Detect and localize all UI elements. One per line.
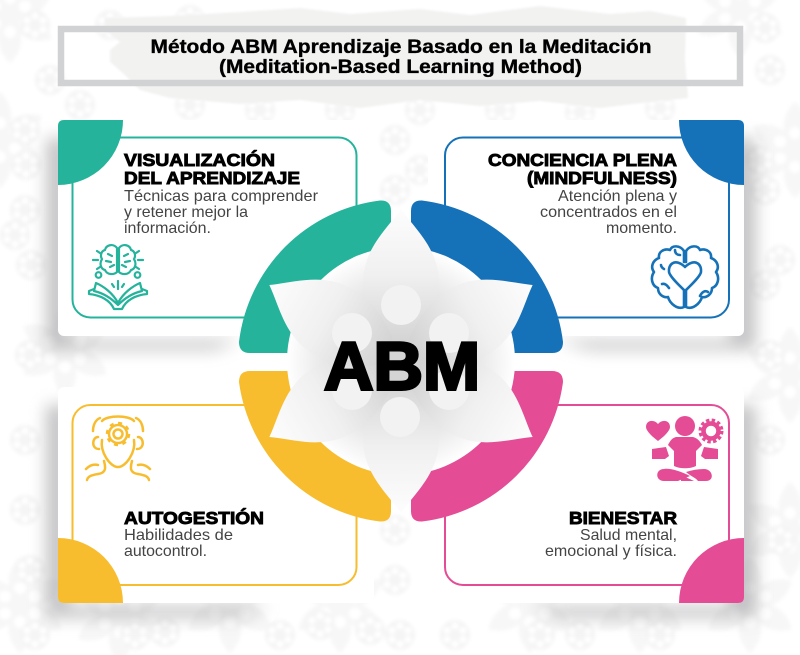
description: emocional y física. [545,543,677,560]
description: momento. [606,220,677,237]
panel: conciencia plena [428,120,744,336]
heading: BIENESTAR [569,508,677,528]
description: autocontrol. [124,543,207,560]
central ring: blue segment [411,200,563,353]
heading: DEL APRENDIZAJE [124,168,300,188]
heading: VISUALIZACIÓN [124,149,275,170]
icon: brain with heart [652,246,718,308]
description: Atención plena y [558,188,677,205]
central flower [250,209,552,513]
description: y retener mejor la [124,204,248,221]
description [540,188,677,237]
central ring: yellow segment [239,371,391,522]
description: Técnicas para comprender [124,188,319,205]
description: concentrados en el [540,204,677,221]
heading: (MINDFULNESS) [527,168,677,188]
center label ABM: ABM [324,328,480,404]
title subtitle: (Meditation-Based Learning Method) [219,57,582,78]
heading: AUTOGESTIÓN [124,507,264,528]
panel: visualización del aprendizaje [58,120,374,336]
icon: person meditating [646,416,722,481]
title text: Método ABM Aprendizaje Basado en la Meditación [150,37,652,58]
description: información. [124,220,211,237]
panel: bienestar [428,387,744,603]
description [124,188,319,237]
description [124,527,233,560]
panel: autogestión [58,387,374,603]
brush stroke behind title [105,6,688,108]
description [545,527,677,560]
card shadows [46,138,756,618]
icon: brain and book [89,245,147,309]
description: Habilidades de [124,527,233,544]
title box [61,29,740,83]
central ring: teal segment [239,200,391,353]
heading: CONCIENCIA PLENA [488,150,677,170]
description: Salud mental, [580,527,677,544]
heading [488,150,677,188]
central ring: pink segment [411,371,563,522]
heading [124,149,300,188]
icon: head with gear [86,416,150,480]
